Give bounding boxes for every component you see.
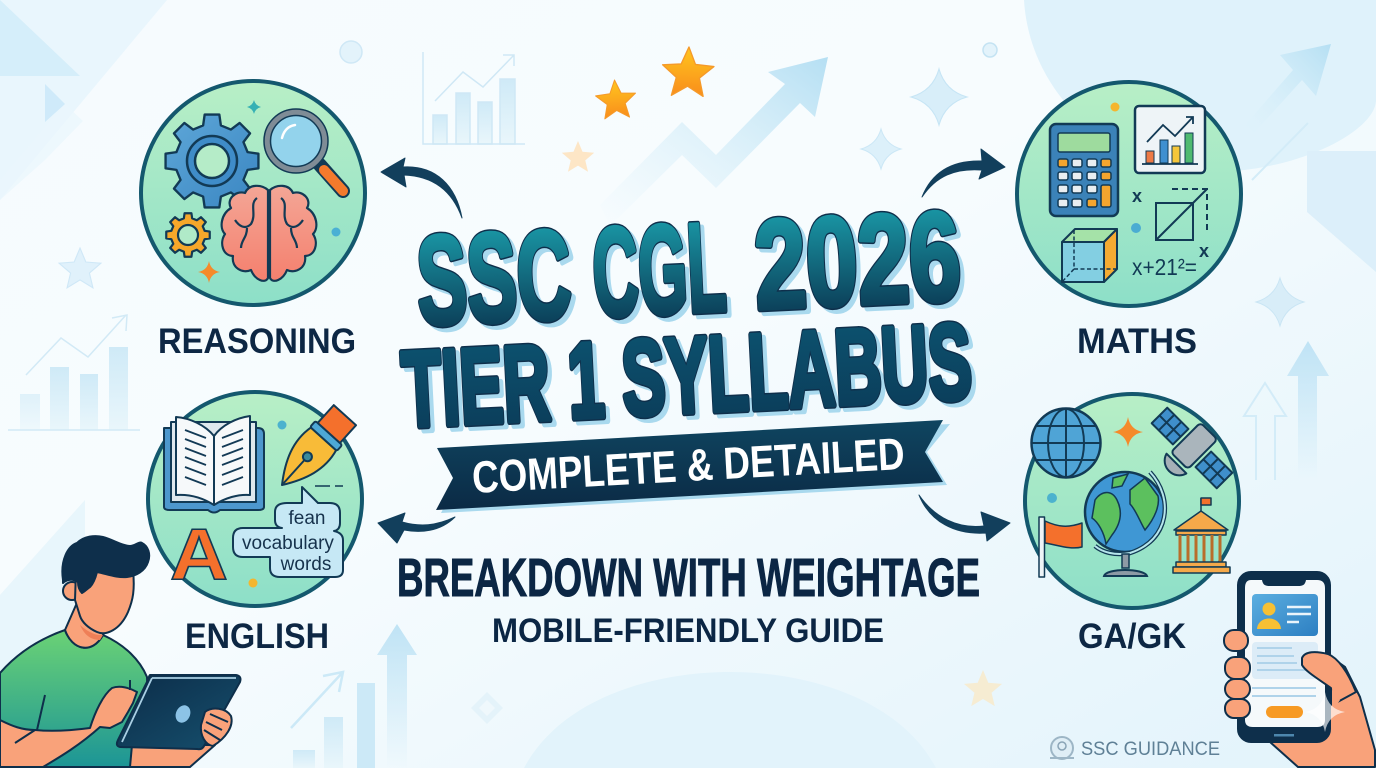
panel: ga/gk: [1025, 394, 1241, 608]
decorative chart: bottom: [291, 672, 375, 768]
logo: ssc guidance: SSC GUIDANCE: [1081, 739, 1220, 760]
icon: cube: [1062, 229, 1117, 282]
icon: large gear: [166, 115, 258, 207]
title: [399, 184, 979, 454]
decorative arrows: [377, 44, 1331, 768]
panel: reasoning: [141, 81, 365, 305]
icon: vocabulary speech bubbles: words: [280, 554, 331, 575]
icon: calculator: [1050, 124, 1118, 216]
text: math symbols: x: [1199, 241, 1209, 261]
icon: brain: [222, 186, 316, 281]
text: math symbols: [1132, 186, 1209, 280]
decorative chart: top: [423, 52, 525, 144]
decorative stars and dots: [59, 41, 1304, 706]
label: maths: MATHS: [1077, 322, 1197, 361]
text: math symbols: x+21²=: [1132, 254, 1197, 280]
illustration: hand holding phone: [1224, 572, 1375, 767]
arrow: to reasoning: [381, 158, 462, 218]
subtitle: breakdown with weightage: BREAKDOWN WITH WEIGHTAGE: [397, 548, 980, 608]
title line 1: SSC CGL 2026: CGL: [589, 195, 729, 344]
title line 1: SSC CGL 2026: SSC: [414, 203, 574, 352]
icon: flag: [1039, 517, 1082, 577]
icon: vocabulary speech bubbles: [233, 487, 343, 577]
arrow: to ga/gk: [919, 495, 1010, 541]
icon: satellite: [1136, 399, 1241, 504]
icon: letter A: A: [170, 515, 228, 595]
icon: fountain pen: [268, 403, 359, 497]
title line 2: TIER 1 SYLLABUS: [399, 300, 979, 454]
title line 1: SSC CGL 2026: [414, 184, 968, 356]
icon: world grid: [1032, 408, 1100, 478]
title line 1: SSC CGL 2026: SSC: [418, 207, 578, 356]
icon: small gear: [166, 213, 210, 257]
arrow: to maths: [922, 149, 1005, 197]
label: reasoning: REASONING: [158, 322, 356, 361]
title line 2: TIER 1 SYLLABUS: TIER 1 SYLLABUS: [399, 300, 974, 450]
panel: maths: [1017, 82, 1241, 306]
text: math symbols: x: [1132, 186, 1142, 206]
panel: english: [148, 392, 362, 606]
title line 2: TIER 1 SYLLABUS: TIER 1 SYLLABUS: [403, 304, 979, 454]
label: ga/gk: GA/GK: [1078, 617, 1186, 656]
icon: chart card: [1135, 106, 1205, 173]
icon: open book: [164, 416, 264, 512]
title line 1: SSC CGL 2026: CGL: [594, 199, 733, 347]
decorative chart: left: [8, 315, 140, 430]
icon: geometry square: [1156, 189, 1207, 240]
illustration: student with tablet: [0, 536, 240, 767]
label: english: ENGLISH: [185, 617, 329, 656]
title line 1: SSC CGL 2026: 2026: [755, 188, 968, 340]
title line 1: SSC CGL 2026: SSC: [414, 203, 574, 352]
subtitle: mobile-friendly guide: MOBILE-FRIENDLY GUIDE: [492, 612, 884, 650]
arrow: to english: [378, 513, 455, 543]
icon: vocabulary speech bubbles: fean: [289, 508, 325, 529]
title line 1: SSC CGL 2026: 2026: [751, 184, 964, 336]
title line 2: TIER 1 SYLLABUS: TIER 1 SYLLABUS: [399, 300, 974, 450]
icon: magnifying glass: [264, 109, 343, 191]
title line 1: SSC CGL 2026: CGL: [589, 195, 729, 344]
icon: government building: [1173, 498, 1230, 573]
title line 1: SSC CGL 2026: 2026: [751, 184, 964, 336]
banner: complete & detailed: COMPLETE & DETAILED: [471, 428, 906, 503]
icon: desk globe: [1085, 472, 1165, 576]
icon: vocabulary speech bubbles: vocabulary: [242, 533, 334, 554]
